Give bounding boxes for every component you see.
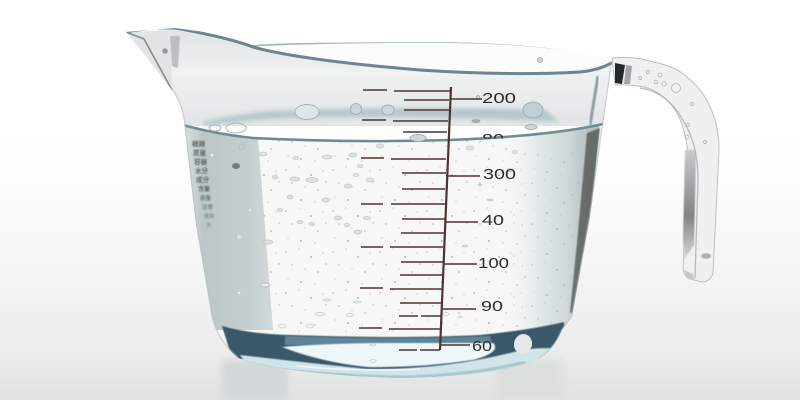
left vertical printed small characters: 成分 [196,175,210,184]
water speckle texture [263,140,528,332]
water surface line [183,124,603,141]
label 80 cut by water line: 80 [482,131,504,148]
right side speckle texture [511,153,583,333]
left vertical printed small characters: 洗 [206,222,211,229]
jug body [120,25,620,382]
label 200: 200 [482,90,516,107]
handle [612,58,719,282]
left vertical printed small characters: 使用 [204,213,214,220]
base ridge highlight [296,366,420,370]
handle inner edge highlight [640,88,698,278]
left vertical printed small characters: 注意 [202,203,214,211]
left vertical printed small characters: 容器 [194,157,208,166]
left gray refraction panel [180,120,273,330]
scale label leader lines [440,99,482,345]
left vertical printed small characters: 容量 [200,194,212,202]
base pebble reflection [514,334,532,354]
left vertical printed small characters: 水分 [195,166,208,175]
right gray shading [506,126,600,328]
left vertical printed small characters: 質量 [193,148,206,157]
label 60: 60 [472,338,492,355]
spout shading [148,56,172,88]
base outer blue-grey edge [275,362,525,377]
spout tip [126,32,172,90]
table shadows under jug [222,360,563,400]
label 100: 100 [478,255,509,272]
label 90: 90 [481,298,503,315]
scale main vertical line [440,87,451,350]
front rim and spout lip [126,28,613,74]
handle embossed bubbles [638,70,706,144]
bubbles in water [259,137,518,362]
base middle blue band [285,336,492,345]
scale tick marks [359,90,450,350]
inner back wall, above front rim [120,25,620,85]
far water edge band [203,108,560,126]
upper glass above water [126,30,612,126]
water main fill [180,120,610,382]
scale labels [472,90,516,355]
handle tip [684,270,695,281]
base light pool [282,343,495,367]
base glass light rim [240,347,551,378]
measuring scale [359,87,482,350]
jug outer edge shading [172,62,612,358]
right wall glass ridge [590,76,598,125]
handle joint [615,63,625,84]
upper bubbles on glass [162,48,543,142]
back rim line [252,42,570,52]
label 40: 40 [482,212,504,229]
left vertical printed small characters: 糖類 [192,139,206,148]
left panel bubbles [211,144,270,294]
handle inner dark stripe [683,150,696,260]
label 300: 300 [483,166,516,183]
right dark stripe [570,128,600,315]
base dark region [222,322,566,378]
left vertical printed small characters [192,139,214,229]
left vertical printed small characters: 含量 [198,185,210,193]
